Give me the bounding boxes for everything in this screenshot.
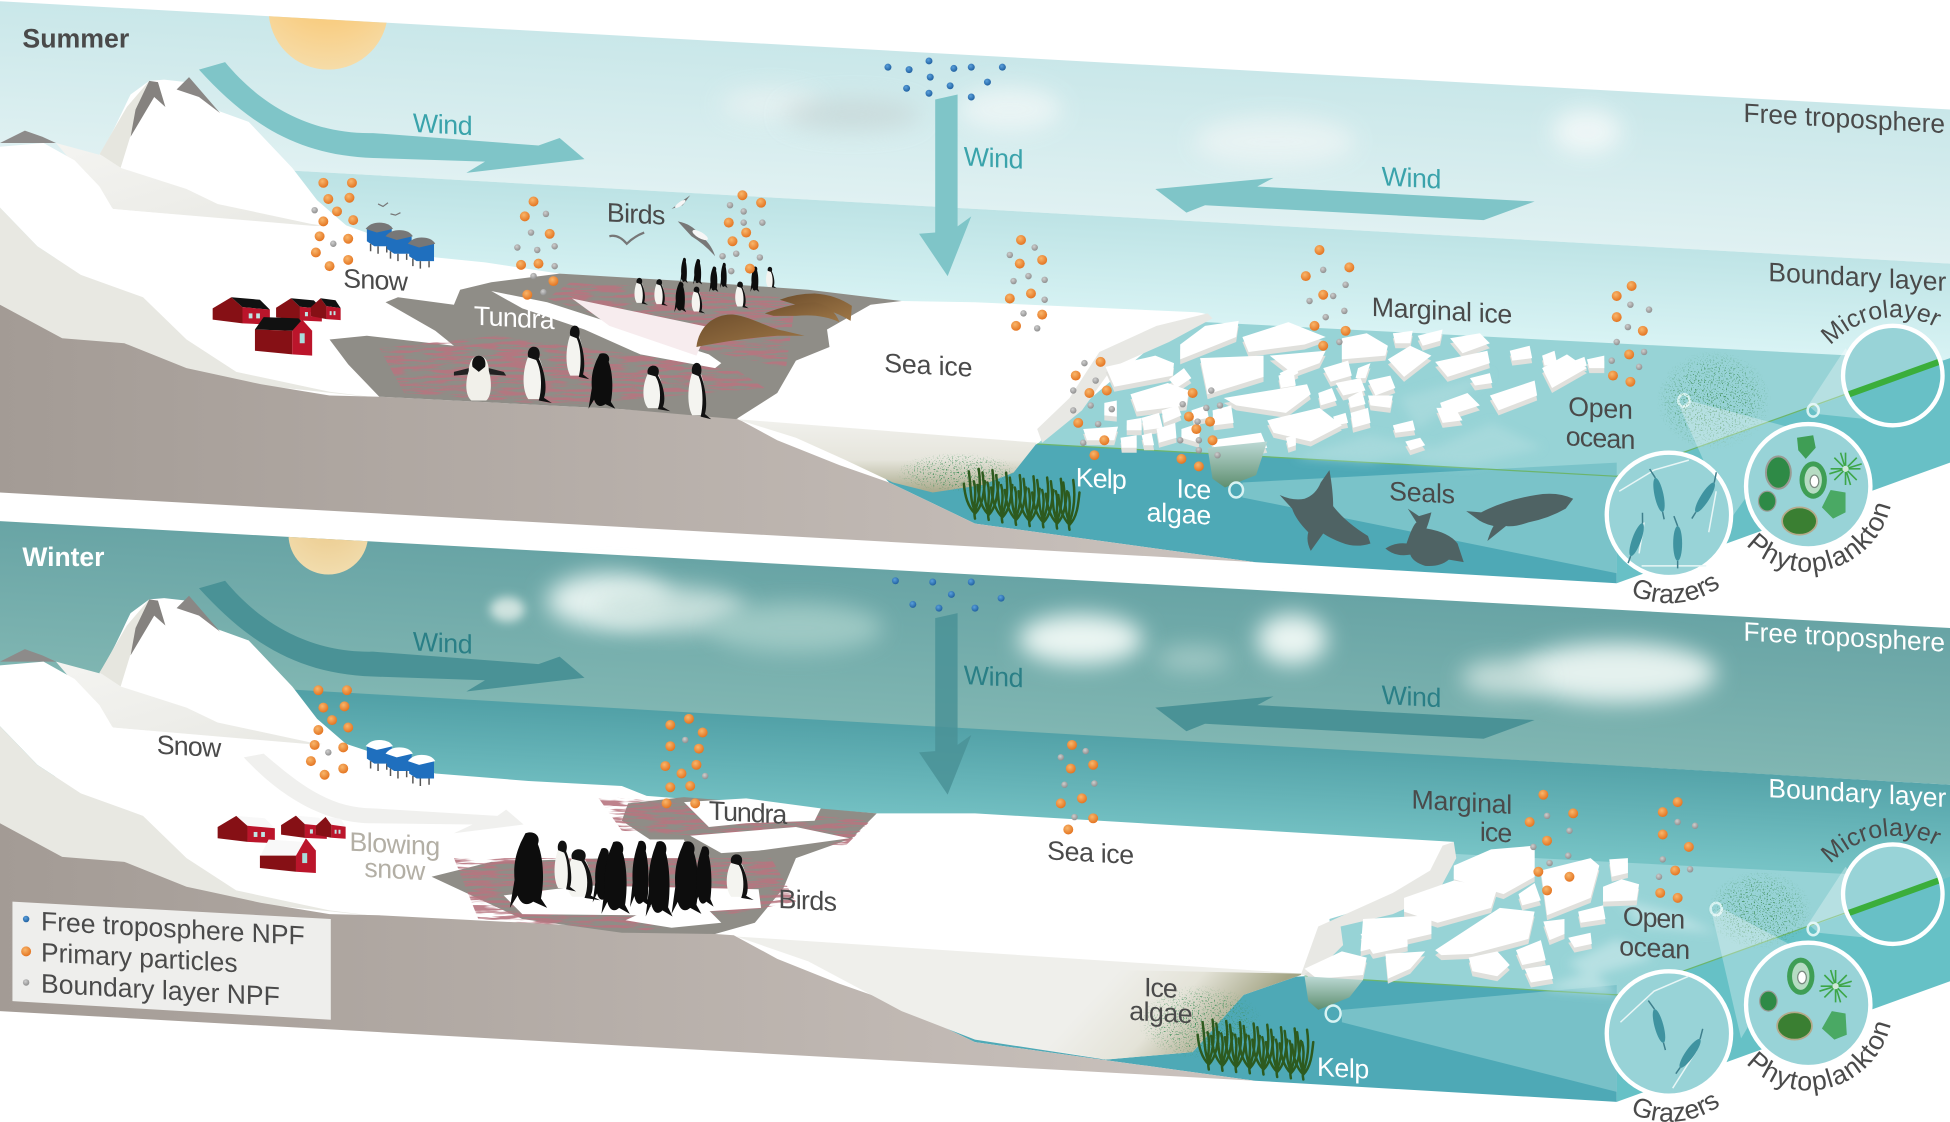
sampling marker circles: [1229, 394, 1819, 497]
label: Birds: Birds: [779, 884, 837, 917]
snow and sea ice: [112, 209, 1208, 443]
label: Blowing snow: [349, 827, 440, 886]
sun: [269, 16, 387, 70]
label: Open ocean: ocean: [1619, 931, 1690, 965]
sea ice underside with ice algae: [736, 936, 1305, 1060]
label: Marginal ice: ice: [1480, 817, 1512, 848]
panel: summer: [0, 1, 1950, 647]
label: Tundra: Tundra: [474, 301, 555, 335]
ice algae pocket: [1208, 441, 1267, 488]
sampling marker circles: [1326, 903, 1819, 1022]
label: Microlayer: Microlayer: [1820, 818, 1942, 862]
label: Kelp: Kelp: [1317, 1052, 1369, 1085]
lichen patches: [379, 281, 796, 405]
mountains behind snow: [0, 77, 354, 233]
label: Wind: Wind: [964, 141, 1024, 175]
particles: boundary layer NPF: [325, 737, 1698, 880]
label: Free troposphere: Free troposphere: [1744, 98, 1945, 139]
legend: [12, 902, 331, 1020]
marginal ice floes: [1083, 321, 1604, 458]
sea ice underside with ice algae: [736, 419, 1037, 492]
label: Open ocean: Open: [1568, 391, 1633, 425]
legend: Primary particles: [41, 937, 238, 978]
mountains behind snow: [0, 596, 354, 751]
label: Snow: Snow: [343, 263, 409, 297]
houses: [213, 297, 341, 356]
beam to microlayer: [1808, 348, 1903, 423]
kelp: [964, 469, 1079, 530]
wind arrow: offshore: [1155, 178, 1535, 220]
research vehicles: [366, 223, 435, 269]
particles: primary: [306, 685, 1694, 903]
ice algae shading: [1045, 970, 1305, 1060]
panel: winter: [0, 521, 1950, 1122]
ice algae pocket: [1305, 976, 1363, 1010]
sea surface foam: [1293, 373, 1542, 466]
snow patches on tundra: [504, 798, 849, 928]
particles: primary: [311, 178, 1648, 471]
label: Marginal ice: Marginal: [1412, 784, 1512, 820]
elephant seals on land: [696, 293, 852, 347]
sea ice edge: [1301, 842, 1456, 976]
light beam to grazers: [1342, 985, 1617, 1092]
label: Wind: Wind: [1382, 680, 1441, 713]
label: Open ocean: ocean: [1566, 421, 1635, 455]
wind arrow: downslope: [199, 62, 585, 173]
label: Sea ice: Sea ice: [884, 348, 973, 383]
blowing snow arrow: [244, 754, 524, 833]
inset: microlayer: [1843, 326, 1943, 425]
seals underwater: [1280, 470, 1573, 566]
label: Wind: Wind: [1382, 161, 1441, 195]
label: Sea ice: Sea ice: [1047, 835, 1134, 870]
label: Snow: Snow: [157, 730, 222, 763]
label: Kelp: Kelp: [1076, 462, 1127, 495]
inset: microlayer: [1843, 844, 1943, 944]
label: Microlayer: Microlayer: [1820, 300, 1942, 344]
microlayer line: [1037, 394, 1846, 476]
label: Seals: Seals: [1389, 476, 1455, 510]
kelp: [1198, 1020, 1313, 1079]
ocean surface: [1037, 321, 1950, 476]
ice algae speckle: [895, 453, 1020, 492]
label: Free troposphere: Free troposphere: [1744, 616, 1945, 658]
sea ice edge: [1037, 313, 1213, 443]
microlayer line: [1305, 913, 1846, 995]
boundary layer band: [0, 673, 1950, 883]
label: Summer: Summer: [22, 23, 129, 53]
free troposphere band: [0, 1, 1950, 264]
particles: free troposphere NPF: [892, 577, 1005, 612]
curved label path phytoplankton: [1746, 1020, 1892, 1090]
free troposphere band: [0, 521, 1950, 785]
ocean front face: [885, 976, 1617, 1102]
label: Ice algae: algae: [1129, 996, 1193, 1029]
label: Open ocean: [1566, 391, 1635, 455]
label: Ice algae: Ice: [1144, 972, 1178, 1004]
curved label path microlayer: [1831, 836, 1949, 864]
label: Grazers: Grazers: [1634, 576, 1719, 604]
label: Wind: Wind: [964, 660, 1024, 693]
inset: phytoplankton: [1746, 943, 1870, 1067]
marginal ice floes: [1305, 846, 1639, 982]
label: Boundary layer: Boundary layer: [1768, 773, 1946, 813]
label: Boundary layer: Boundary layer: [1768, 257, 1946, 297]
lichen patches: [454, 796, 871, 930]
ice algae speckle: [1138, 985, 1262, 1060]
ocean front face: [885, 444, 1617, 583]
ocean right face: [1617, 877, 1950, 1102]
label: Open ocean: Open: [1623, 901, 1685, 935]
inset: phytoplankton: [1746, 424, 1870, 548]
boundary layer band: [0, 154, 1950, 364]
wind arrow: descending: [919, 613, 971, 795]
particles: boundary layer NPF: [311, 202, 1652, 458]
tundra: [432, 797, 877, 934]
phytoplankton bloom speckle: [1657, 351, 1771, 450]
birds in flight: [378, 195, 715, 256]
clouds: [490, 573, 1716, 703]
light beam to grazers: [1242, 463, 1617, 573]
legend: Free troposphere NPF: [41, 906, 305, 951]
label: Ice algae: Ice: [1176, 473, 1211, 505]
research vehicles: [366, 740, 435, 786]
foreground slopes and ground: [0, 143, 1255, 562]
clouds: [721, 87, 1622, 167]
label: Tundra: Tundra: [709, 796, 787, 830]
beam to microlayer: [1808, 867, 1903, 941]
ocean surface: [1293, 846, 1950, 995]
particles: free troposphere NPF: [884, 57, 1006, 100]
curved label path grazers: [1630, 585, 1724, 603]
label: Ice algae: [1129, 972, 1193, 1029]
label: Wind: Wind: [413, 108, 473, 141]
ocean right face: [1617, 358, 1950, 583]
snow patch on tundra: [491, 291, 721, 368]
label: Ice algae: [1147, 473, 1211, 531]
lichen-stained snow: [572, 298, 709, 356]
label: Phytoplankton: Phytoplankton: [1747, 1022, 1890, 1096]
legend: Boundary layer NPF: [41, 968, 280, 1012]
beam to phytoplankton: [1680, 400, 1796, 520]
label: Birds: Birds: [607, 197, 665, 231]
wind arrow: offshore: [1155, 696, 1535, 739]
label: Marginal ice: [1412, 784, 1512, 848]
label: Phytoplankton: Phytoplankton: [1747, 504, 1890, 578]
label: Ice algae: algae: [1147, 497, 1211, 531]
penguins on shore: [454, 258, 777, 419]
wind arrow: descending: [919, 95, 971, 276]
snow and sea ice: [112, 728, 1454, 975]
curved label path phytoplankton: [1746, 501, 1892, 572]
inset: grazers: [1607, 971, 1731, 1096]
label: Blowing snow: Blowing: [349, 827, 440, 862]
beam to phytoplankton: [1712, 908, 1796, 1038]
sun: [288, 536, 368, 574]
curved label path grazers: [1630, 1103, 1724, 1122]
houses: [218, 816, 346, 873]
sea surface foam: [1542, 898, 1716, 995]
label: Marginal ice: Marginal ice: [1372, 292, 1512, 330]
label: Wind: Wind: [413, 626, 473, 660]
wind arrow: downslope: [199, 581, 585, 691]
label: Open ocean: [1619, 901, 1690, 965]
label: Winter: Winter: [22, 542, 104, 572]
curved label path microlayer: [1831, 317, 1949, 346]
phytoplankton bloom speckle: [1707, 871, 1812, 950]
penguin huddle: [510, 832, 754, 917]
label: Blowing snow: snow: [364, 853, 426, 886]
inset: grazers: [1607, 453, 1731, 577]
foreground slopes and ground: [0, 662, 1255, 1081]
tundra: [330, 274, 902, 419]
